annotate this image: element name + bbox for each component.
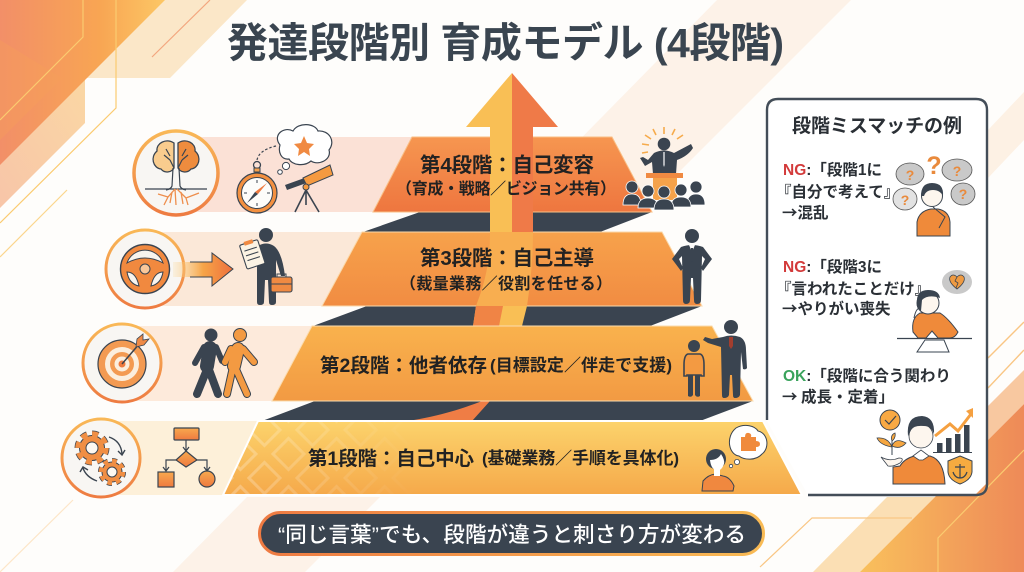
level 2 text: (目標設定／伴走で支援) xyxy=(490,355,672,375)
icon: mentor and child xyxy=(684,320,747,398)
level 4 text: （育成・戦略／ビジョン共有） xyxy=(396,179,616,198)
level 3 block xyxy=(322,232,702,306)
icon: confused person xyxy=(893,152,975,236)
NG example 1 text: 『自分で考えて』 xyxy=(776,183,899,201)
NG example 1 text: NG:「段階1に xyxy=(783,161,882,179)
level 4 text: 第4段階：自己変容 xyxy=(420,154,594,177)
icon: speaker and audience xyxy=(623,127,705,210)
level 2 text: 第2段階：他者依存 xyxy=(320,355,487,377)
OK example text: → 成長・定着」 xyxy=(782,385,894,407)
panel heading: 段階ミスマッチの例 xyxy=(792,115,962,137)
level 2 text xyxy=(320,355,672,377)
icon: flowchart xyxy=(158,428,215,487)
panel: mismatch examples frame xyxy=(767,98,987,495)
icon: thinking person with puzzle xyxy=(702,425,767,491)
icon: gears xyxy=(62,419,140,497)
OK example text xyxy=(782,367,951,407)
icon: confused person: ? xyxy=(953,163,961,179)
OK example text: OK:「段階に合う関わり xyxy=(783,367,951,385)
icon: steering wheel xyxy=(106,230,184,308)
level 3 text: 第3段階：自己主導 xyxy=(420,246,594,270)
side band level 2 xyxy=(130,326,325,401)
icon: thought cloud with star xyxy=(257,125,332,174)
lower tail of growth arrow xyxy=(408,306,527,421)
level 3 text: （裁量業務／役割を任せる） xyxy=(400,274,612,293)
icon: confused person: ? xyxy=(906,167,914,183)
icon: confused person: ? xyxy=(926,152,942,180)
level 4 block xyxy=(373,137,652,212)
icon: man in suit xyxy=(672,229,712,304)
callout pill xyxy=(260,512,764,554)
side band level 4 xyxy=(190,137,425,212)
icon: telescope xyxy=(285,165,333,212)
level 2 block xyxy=(272,326,753,401)
level 3 text xyxy=(400,246,612,293)
title: 発達段階別 育成モデル (4段階) xyxy=(227,20,784,66)
side band level 3 xyxy=(150,232,375,306)
icon: confused person: ? xyxy=(901,192,909,208)
level 1 text xyxy=(308,448,679,470)
NG example 2 text: →やりがい喪失 xyxy=(782,297,891,319)
icon: brain tree xyxy=(134,131,218,215)
level 1 text: (基礎業務／手順を具体化) xyxy=(482,448,679,468)
NG example 1 text: →混乱 xyxy=(782,201,829,223)
level 1 text: 第1段階：自己中心 xyxy=(308,448,474,470)
icon: growing person xyxy=(877,408,973,484)
icon: compass xyxy=(237,162,277,213)
NG example 2 text xyxy=(776,258,930,319)
icon: two people walking xyxy=(195,328,254,394)
NG example 2 text: NG:「段階3に xyxy=(783,258,882,276)
side band level 1 xyxy=(100,421,270,495)
callout pill: “同じ言葉”でも、段階が違うと刺さり方が変わる xyxy=(278,523,746,547)
icon: person with clipboard and briefcase xyxy=(239,228,292,305)
pyramid shadow steps xyxy=(262,212,753,421)
icon: confused person: ? xyxy=(959,186,967,202)
NG example 1 text xyxy=(776,161,899,223)
level 1 block xyxy=(223,421,802,495)
NG example 2 text: 『言われたことだけ』 xyxy=(776,280,930,298)
arrow: wheel to person xyxy=(173,253,233,286)
growth arrow xyxy=(466,73,558,306)
level 4 text xyxy=(396,154,616,198)
icon: discouraged person xyxy=(897,270,972,352)
icon: target xyxy=(83,324,161,402)
